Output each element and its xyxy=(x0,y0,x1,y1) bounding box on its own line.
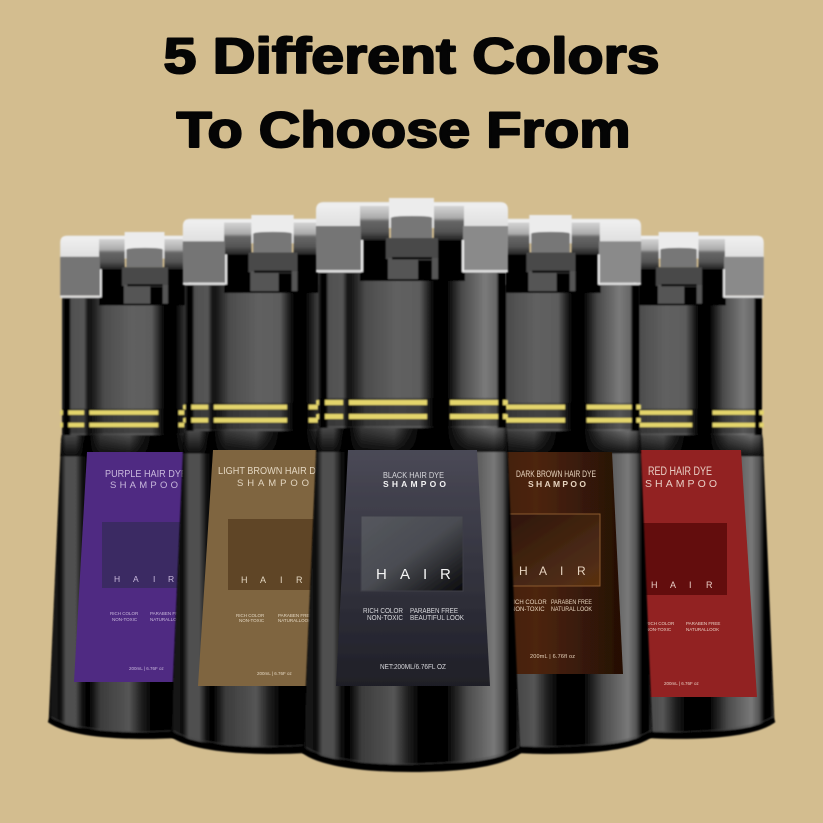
bottle: purple hair dye shampoo: NON-TOXIC xyxy=(112,617,138,622)
bottle: black hair dye shampoo: SHAMPOO xyxy=(383,479,446,489)
bottle: black hair dye shampoo: BLACK HAIR DYE xyxy=(383,470,444,480)
title: 5 Different Colors xyxy=(164,28,660,84)
bottle: black hair dye shampoo: BEAUTIFUL LOOK xyxy=(410,613,464,622)
bottle: black hair dye shampoo: NON-TOXIC xyxy=(367,613,403,622)
bottle: light brown hair dye shampoo: NATURALLOOK xyxy=(278,618,311,623)
bottle: dark brown hair dye shampoo: DARK BROWN HAIR DYE xyxy=(516,469,596,479)
bottle: light brown hair dye shampoo: SHAMPOO xyxy=(237,478,309,489)
bottle: dark brown hair dye shampoo: SHAMPOO xyxy=(528,479,586,489)
title xyxy=(164,28,660,158)
bottle: red hair dye shampoo: HAIR xyxy=(651,580,713,590)
bottle: light brown hair dye shampoo: RICH COLOR xyxy=(236,613,265,618)
bottle: purple hair dye shampoo: SHAMPOO xyxy=(110,480,178,491)
bottle: light brown hair dye shampoo: 200mL | 6.76F oz xyxy=(257,671,293,676)
bottle: black hair dye shampoo: PARABEN FREE xyxy=(410,606,458,615)
bottle: red hair dye shampoo: NATURALLOOK xyxy=(686,627,719,632)
bottle: purple hair dye shampoo: HAIR xyxy=(114,574,174,584)
bottle: black hair dye shampoo xyxy=(302,198,521,772)
bottle: red hair dye shampoo: RICH COLOR xyxy=(646,621,675,626)
bottle: red hair dye shampoo xyxy=(582,232,775,739)
bottle: dark brown hair dye shampoo: PARABEN FREE xyxy=(551,600,592,606)
bottle: black hair dye shampoo: NET:200ML/6.76FL OZ xyxy=(380,662,446,671)
bottle: purple hair dye shampoo: NATURALLOOK xyxy=(150,617,183,622)
bottle: purple hair dye shampoo: 200mL | 6.76F oz xyxy=(129,666,165,671)
title: To Choose From xyxy=(176,102,630,158)
bottle: purple hair dye shampoo: PURPLE HAIR DYE xyxy=(105,469,187,480)
bottle: black hair dye shampoo: RICH COLOR xyxy=(363,606,403,615)
bottle: light brown hair dye shampoo: NON-TOXIC xyxy=(239,618,265,623)
bottle: purple hair dye shampoo xyxy=(48,232,241,739)
bottle: purple hair dye shampoo: PARABEN FREE xyxy=(150,611,184,616)
bottle: light brown hair dye shampoo: HAIR xyxy=(241,575,303,585)
bottle: dark brown hair dye shampoo: NATURAL LOOK xyxy=(551,607,592,613)
bottle: black hair dye shampoo: HAIR xyxy=(376,566,451,583)
bottle: purple hair dye shampoo: RICH COLOR xyxy=(110,611,139,616)
bottle: light brown hair dye shampoo xyxy=(170,215,375,754)
bottle: dark brown hair dye shampoo: RICH COLOR xyxy=(509,600,547,606)
bottle: dark brown hair dye shampoo: 200mL | 6.76fl oz xyxy=(530,654,575,660)
bottle: light brown hair dye shampoo: LIGHT BROWN HAIR DYE xyxy=(218,466,328,477)
bottle: red hair dye shampoo: NON-TOXIC xyxy=(646,627,672,632)
bottle: dark brown hair dye shampoo: HAIR xyxy=(519,564,586,578)
bottle: dark brown hair dye shampoo xyxy=(448,215,653,754)
bottle: red hair dye shampoo: RED HAIR DYE xyxy=(648,466,712,478)
bottle: red hair dye shampoo: PARABEN FREE xyxy=(686,621,720,626)
bottle: light brown hair dye shampoo: PARABEN FREE xyxy=(278,613,312,618)
bottle: red hair dye shampoo: SHAMPOO xyxy=(645,478,717,490)
bottle: red hair dye shampoo: 200mL | 6.76F oz xyxy=(664,681,700,686)
bottle: dark brown hair dye shampoo: NON-TOXIC xyxy=(511,607,545,613)
